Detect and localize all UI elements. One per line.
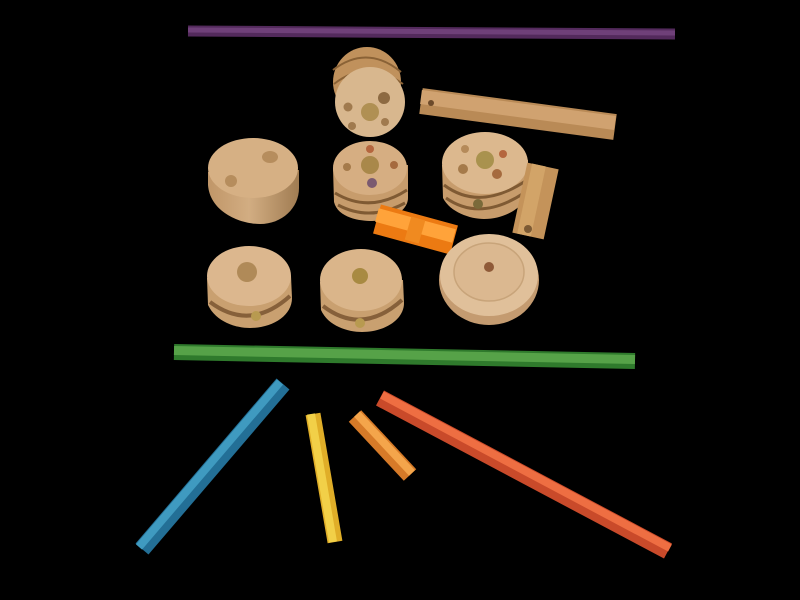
short wooden dowel bbox=[524, 165, 543, 236]
green rod bbox=[174, 350, 635, 361]
large disc, left bbox=[208, 138, 299, 224]
centre spool with holes bbox=[333, 141, 408, 221]
orange plastic connector bbox=[377, 215, 454, 240]
purple rod bbox=[188, 30, 675, 34]
tall wooden spool, top centre bbox=[333, 47, 405, 137]
bottom left spool bbox=[207, 246, 292, 328]
small orange rod bbox=[355, 414, 412, 475]
blue rod bbox=[139, 382, 283, 549]
right spool with holes bbox=[442, 132, 528, 219]
red rod bbox=[380, 395, 670, 551]
bottom middle spool bbox=[320, 249, 404, 332]
large disc with rim bbox=[439, 234, 539, 325]
wooden tube, top right bbox=[421, 97, 615, 127]
yellow rod bbox=[311, 414, 335, 542]
